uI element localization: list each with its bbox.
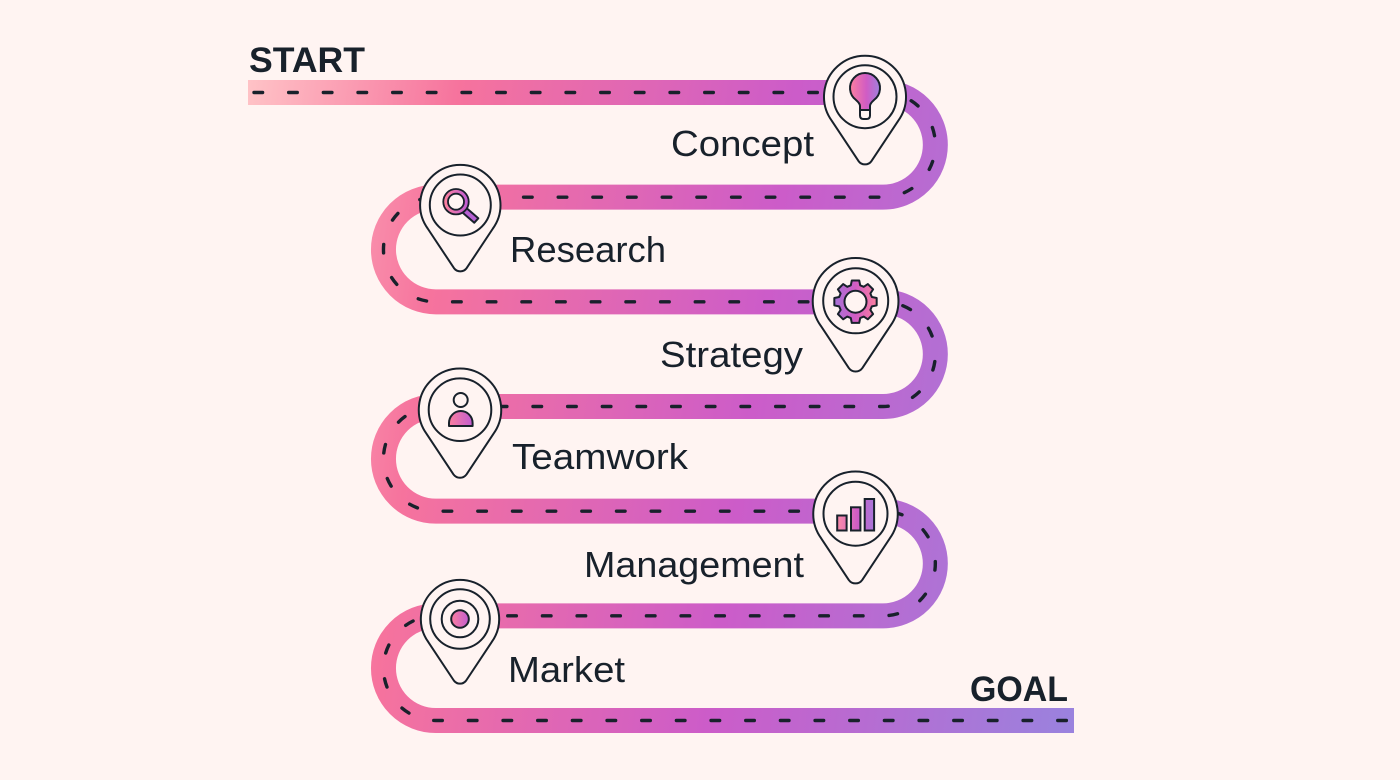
winding road: [248, 92, 1074, 720]
pin: Concept: [824, 56, 906, 164]
label: Teamwork: Teamwork: [512, 436, 689, 477]
label: Research: Research: [510, 229, 666, 270]
icon: person: [449, 393, 473, 426]
label: Concept: Concept: [671, 123, 814, 164]
pin: Management: [813, 472, 898, 583]
bar chart icon: [837, 499, 874, 530]
heading: START: START: [249, 41, 365, 80]
icon: target: [442, 601, 478, 637]
label: Strategy: Strategy: [660, 334, 803, 375]
icon: magnifying glass: [443, 189, 478, 223]
label: Management: Management: [584, 544, 804, 585]
pin: Teamwork: [419, 369, 501, 478]
icon: gear: [834, 281, 877, 323]
pin: Research: [420, 165, 500, 271]
icon: light bulb: [850, 73, 880, 119]
heading: GOAL: GOAL: [970, 670, 1068, 709]
pin: Strategy: [813, 258, 898, 372]
pin: Market: [421, 580, 499, 684]
label: Market: Market: [508, 649, 625, 690]
